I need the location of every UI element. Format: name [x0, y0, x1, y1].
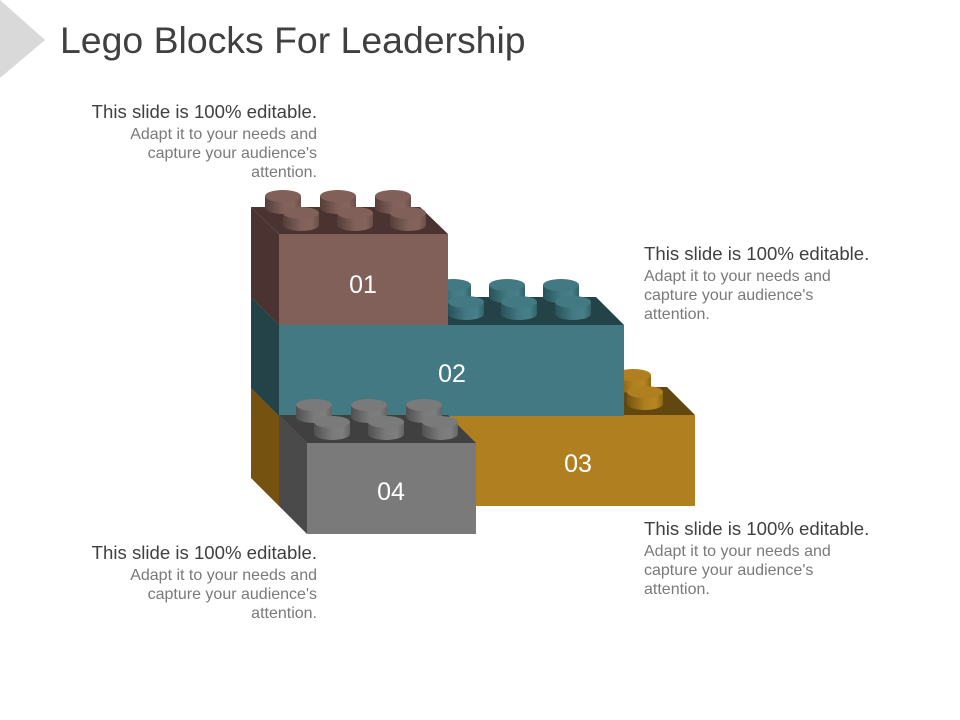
block 04	[279, 399, 476, 534]
text block: bottom right: capture your audience's	[644, 562, 813, 579]
text block: bottom left: capture your audience's	[148, 586, 317, 603]
text block: bottom left: Adapt it to your needs and	[130, 567, 317, 584]
header arrow	[0, 0, 45, 78]
text block: bottom right: Adapt it to your needs and	[644, 543, 831, 560]
text block: bottom right: This slide is 100% editable.	[644, 518, 869, 539]
text block: top left	[92, 101, 317, 181]
label 02: 02	[438, 360, 466, 388]
text block: bottom left: This slide is 100% editable.	[92, 542, 317, 563]
block 02	[251, 279, 624, 416]
text block: top right: attention.	[644, 306, 710, 323]
text block: top right	[644, 243, 869, 323]
text block: top left: Adapt it to your needs and	[130, 126, 317, 143]
text block: bottom right: attention.	[644, 581, 710, 598]
studs: block 04	[296, 399, 458, 440]
text block: top left: This slide is 100% editable.	[92, 101, 317, 122]
text block: top left: capture your audience's	[148, 145, 317, 162]
text block: bottom left: attention.	[251, 605, 317, 622]
block 03	[251, 369, 695, 506]
label 04: 04	[377, 478, 405, 506]
text block: top right: This slide is 100% editable.	[644, 243, 869, 264]
text block: top left: attention.	[251, 164, 317, 181]
block 01	[251, 190, 448, 325]
studs: block 01	[265, 190, 426, 231]
studs: block 02	[435, 279, 591, 320]
text block: top right: capture your audience's	[644, 287, 813, 304]
title: Lego Blocks For Leadership	[60, 19, 526, 61]
label 03: 03	[564, 450, 592, 478]
text block: bottom left	[92, 542, 317, 622]
text block: bottom right	[644, 518, 869, 598]
text block: top right: Adapt it to your needs and	[644, 268, 831, 285]
label 01: 01	[349, 271, 377, 299]
studs: block 03	[615, 369, 663, 410]
